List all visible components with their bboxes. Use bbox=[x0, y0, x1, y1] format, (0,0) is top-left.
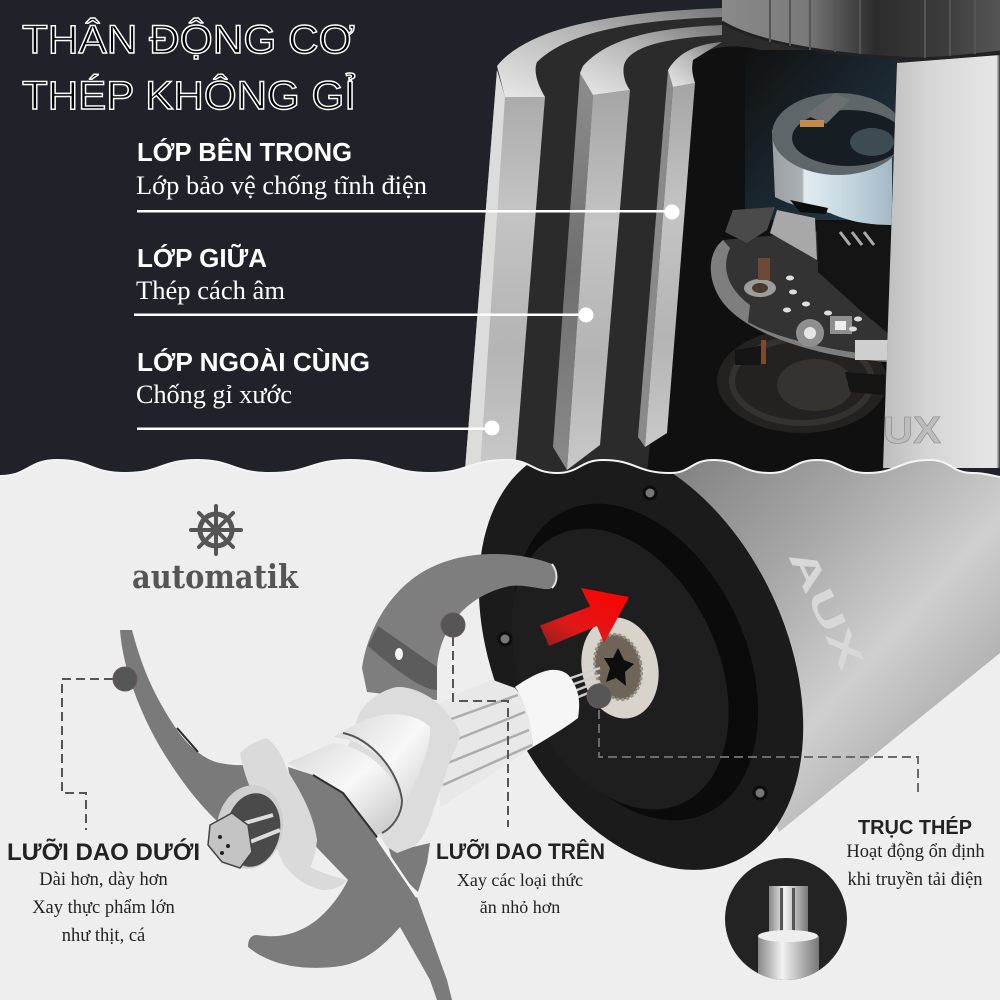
arrow: red insert direction bbox=[540, 588, 629, 646]
middle steel layer bbox=[553, 25, 722, 470]
tube front section bbox=[333, 714, 430, 833]
black base ring bbox=[479, 461, 804, 870]
label: steel shaft: khi truyền tải điện bbox=[847, 870, 983, 890]
blade: rear tab behind collar bbox=[385, 835, 430, 892]
inner black disc bbox=[514, 528, 728, 810]
label: lower blade bbox=[7, 838, 200, 946]
callout: inner layer: Lớp bảo vệ chống tĩnh điện bbox=[136, 171, 427, 200]
motor interior dark base bbox=[500, 15, 900, 490]
callout: inner layer bbox=[136, 137, 680, 220]
motor cylinder side bbox=[772, 130, 892, 225]
label: lower blade: như thịt, cá bbox=[62, 926, 145, 946]
title bbox=[22, 17, 356, 118]
brand lettering on cone: AUX bbox=[781, 542, 872, 675]
illustration: stainless steel motor body cutaway bbox=[465, 0, 1000, 490]
motor cylinder top bbox=[772, 93, 904, 175]
lid ribbed base bbox=[722, 0, 1000, 59]
ribbed sleeve bbox=[440, 680, 533, 807]
collar bbox=[340, 687, 460, 853]
title: THÉP KHÔNG GỈ bbox=[22, 72, 356, 118]
glass tinted back wall bbox=[745, 50, 900, 220]
blade: lower large front bbox=[248, 767, 452, 1000]
label: upper blade: LƯỠI DAO TRÊN bbox=[436, 839, 605, 864]
panel: light lower section with wavy top bbox=[0, 461, 1000, 870]
steel motor cone bbox=[673, 461, 1000, 832]
motor internals bbox=[711, 50, 904, 433]
panel: dark top background bbox=[0, 0, 1000, 490]
lower fan bbox=[717, 329, 887, 433]
callout: outer layer bbox=[136, 347, 500, 436]
smooth white sleeve end bbox=[515, 670, 579, 747]
hub open end with bolt bbox=[208, 780, 290, 874]
control tab bbox=[725, 207, 775, 243]
blade hub assembly bbox=[287, 668, 600, 853]
blade: upper bbox=[362, 554, 556, 700]
circuit plate bbox=[711, 222, 890, 362]
label: steel shaft: Hoạt động ổn định bbox=[846, 842, 985, 862]
blade: lower long arm bbox=[120, 630, 262, 850]
callout: middle layer bbox=[134, 243, 594, 322]
callout leader: steel shaft bbox=[599, 710, 918, 793]
outer shell bbox=[883, 55, 1000, 468]
steel bracket bbox=[770, 210, 817, 260]
blade locking bracket bbox=[240, 738, 347, 890]
label: steel shaft: TRỤC THÉP bbox=[858, 816, 972, 839]
dark chamber behind inner layer bbox=[645, 46, 897, 490]
callout: inner layer: LỚP BÊN TRONG bbox=[137, 137, 352, 167]
inset: steel shaft close-up bbox=[725, 858, 847, 986]
icon: automatik ship wheel logo bbox=[191, 506, 241, 554]
label: upper blade: Xay các loại thức bbox=[457, 870, 583, 890]
drive socket bbox=[572, 610, 668, 726]
callout leader: upper blade bbox=[453, 637, 508, 827]
callout: outer layer: LỚP NGOÀI CÙNG bbox=[137, 347, 370, 377]
dark circuit cluster bbox=[817, 222, 890, 335]
outer steel layer bbox=[465, 8, 722, 470]
brand mark on shell: UX bbox=[883, 410, 942, 452]
title: THÂN ĐỘNG CƠ bbox=[22, 17, 355, 62]
inner steel layer bbox=[638, 42, 722, 447]
icon: ring screws bbox=[499, 487, 766, 799]
label: lower blade: Xay thực phẩm lớn bbox=[32, 898, 175, 918]
marker dots bbox=[113, 613, 611, 708]
callout: outer layer: Chống gỉ xước bbox=[136, 380, 292, 409]
splined shaft tip bbox=[565, 668, 600, 698]
callout: middle layer: LỚP GIỮA bbox=[137, 243, 267, 273]
logo text: automatik bbox=[132, 557, 299, 596]
label: upper blade: ăn nhỏ hơn bbox=[480, 897, 560, 917]
wave divider line bbox=[0, 460, 1000, 477]
label: steel shaft bbox=[846, 816, 985, 890]
tube narrow section bbox=[287, 743, 400, 835]
callout leader: lower blade bbox=[62, 679, 113, 830]
ring groove bbox=[515, 504, 758, 820]
callout: middle layer: Thép cách âm bbox=[136, 276, 285, 305]
label: lower blade: LƯỠI DAO DƯỚI bbox=[7, 838, 200, 866]
label: upper blade bbox=[436, 839, 605, 917]
label: lower blade: Dài hơn, dày hơn bbox=[39, 870, 168, 890]
